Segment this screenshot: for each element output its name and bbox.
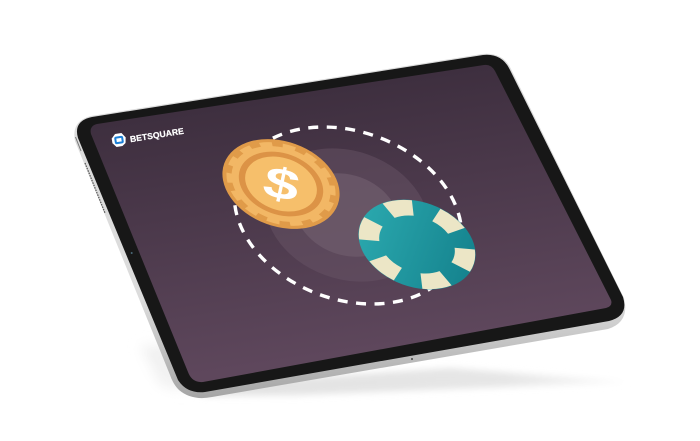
side mic xyxy=(131,252,133,254)
background circles xyxy=(246,126,448,304)
logo wordmark: BETSQUARE xyxy=(129,126,185,144)
side buttons xyxy=(76,137,105,213)
logo icon xyxy=(111,132,127,148)
betsquare logo xyxy=(111,126,185,148)
shadow under tablet xyxy=(140,345,630,396)
dollar sign: $ xyxy=(259,157,304,211)
tablet screen xyxy=(91,65,611,382)
gold dollar coin xyxy=(210,123,352,245)
dashed orbit ring xyxy=(209,97,487,334)
teal poker chip xyxy=(342,180,492,309)
tablet silver body xyxy=(74,54,625,398)
camera dot xyxy=(411,358,413,360)
tablet black bezel xyxy=(77,55,624,392)
